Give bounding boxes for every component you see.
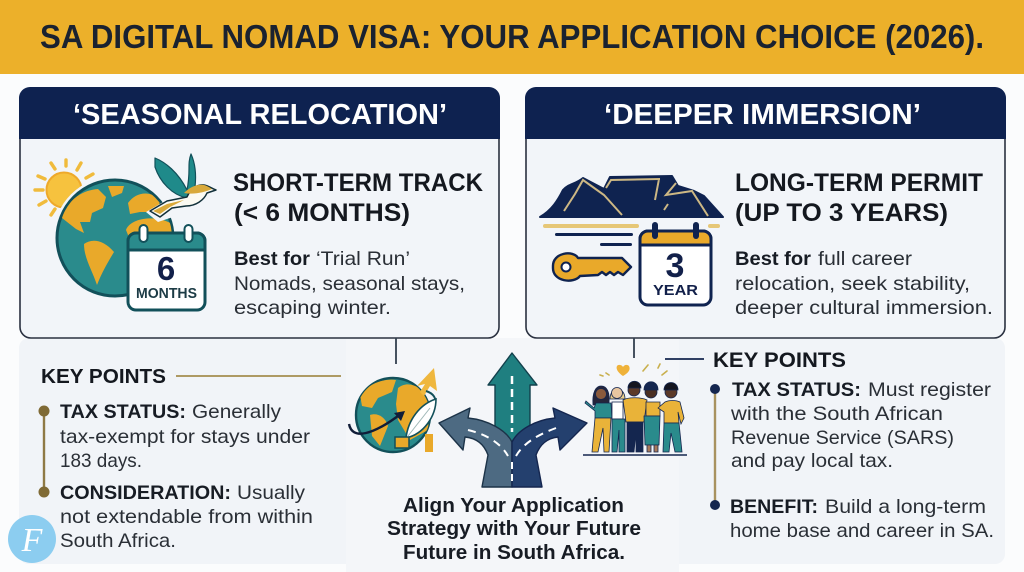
- panel: deeper immersion: [525, 87, 1006, 338]
- text: benefit: home base and career in SA.: [730, 520, 994, 542]
- icon: globe with sun, bird and calendar: [35, 154, 216, 310]
- text: long-term description: Best for: [735, 248, 811, 270]
- text: consideration: Usually: [237, 482, 305, 504]
- text: consideration: [60, 482, 313, 552]
- icon: table mountain, key and calendar: 3: [666, 247, 684, 285]
- heading: key points: KEY POINTS: [41, 366, 166, 388]
- person 1: [585, 386, 612, 452]
- text: tax status: TAX STATUS:: [732, 379, 861, 401]
- text: tax status: with the South African: [730, 403, 943, 425]
- icon: table mountain, key and calendar: [540, 176, 723, 305]
- text: consideration: CONSIDERATION:: [60, 482, 231, 504]
- text: tax status: tax-exempt for stays under: [60, 426, 311, 448]
- text: long-term permit heading: (UP TO 3 YEARS): [735, 199, 948, 227]
- text: consideration: not extendable from within: [60, 506, 313, 528]
- icon: watermark logo: [8, 515, 56, 563]
- text: tax status: and pay local tax.: [731, 450, 893, 472]
- text: tax status: [60, 401, 311, 472]
- heading: key points: KEY POINTS: [713, 349, 846, 372]
- text: short-term description: escaping winter.: [234, 297, 391, 319]
- heading: seasonal relocation: ‘SEASONAL RELOCATION’: [73, 99, 447, 131]
- text: long-term description: full career: [818, 248, 913, 270]
- text: short-term description: Nomads, seasonal stays,: [234, 273, 465, 295]
- person 3: [623, 381, 647, 452]
- text: centre message: Strategy with Your Future: [387, 518, 641, 540]
- text: short-term description: Best for: [234, 248, 310, 270]
- text: tax status: Revenue Service (SARS): [731, 427, 954, 449]
- icon: globe with quill and arrow: [349, 368, 437, 452]
- text: short-term track heading: SHORT-TERM TRACK: [233, 169, 483, 197]
- person 2: [610, 388, 625, 452]
- panel: right key points: [665, 349, 994, 542]
- text: tax status: 183 days.: [60, 450, 142, 472]
- icon: group of people: [583, 364, 687, 455]
- title banner: [0, 0, 1024, 74]
- text: short-term description: [234, 248, 465, 319]
- text: tax status: [730, 379, 992, 472]
- text: long-term permit heading: LONG-TERM PERMIT: [735, 169, 983, 197]
- panel: seasonal relocation: [19, 87, 500, 338]
- text: long-term description: [735, 248, 993, 319]
- person 5: [658, 382, 684, 452]
- text: long-term description: relocation, seek stability,: [735, 273, 970, 295]
- icon: table mountain, key and calendar: YEAR: [653, 283, 699, 299]
- text: consideration: South Africa.: [60, 530, 176, 552]
- text: long-term permit heading: [735, 169, 983, 227]
- text: centre message: Future in South Africa.: [403, 542, 625, 564]
- text: tax status: Generally: [192, 401, 281, 423]
- heading: deeper immersion: ‘DEEPER IMMERSION’: [604, 99, 921, 131]
- text: centre message: [387, 495, 641, 564]
- icon: globe with sun, bird and calendar: 6: [157, 250, 175, 287]
- icon: watermark logo: F: [21, 522, 44, 559]
- text: short-term track heading: [233, 169, 483, 227]
- text: tax status: TAX STATUS:: [60, 401, 186, 423]
- text: tax status: Must register: [868, 379, 992, 401]
- text: long-term description: deeper cultural immersion.: [735, 297, 993, 319]
- person 4: [644, 382, 660, 452]
- text: short-term track heading: (< 6 MONTHS): [234, 199, 410, 227]
- text: benefit: [730, 496, 994, 542]
- text: benefit: BENEFIT:: [730, 496, 818, 518]
- panel: left key points: [38, 366, 341, 552]
- text: short-term description: ‘Trial Run’: [316, 248, 410, 270]
- title: SA DIGITAL NOMAD VISA: YOUR APPLICATION CHOICE (2026).: [40, 18, 984, 55]
- icon: crossroads arrows: [439, 353, 587, 487]
- icon: globe with sun, bird and calendar: MONTHS: [136, 286, 197, 302]
- text: centre message: Align Your Application: [403, 495, 624, 517]
- text: benefit: Build a long-term: [825, 496, 986, 518]
